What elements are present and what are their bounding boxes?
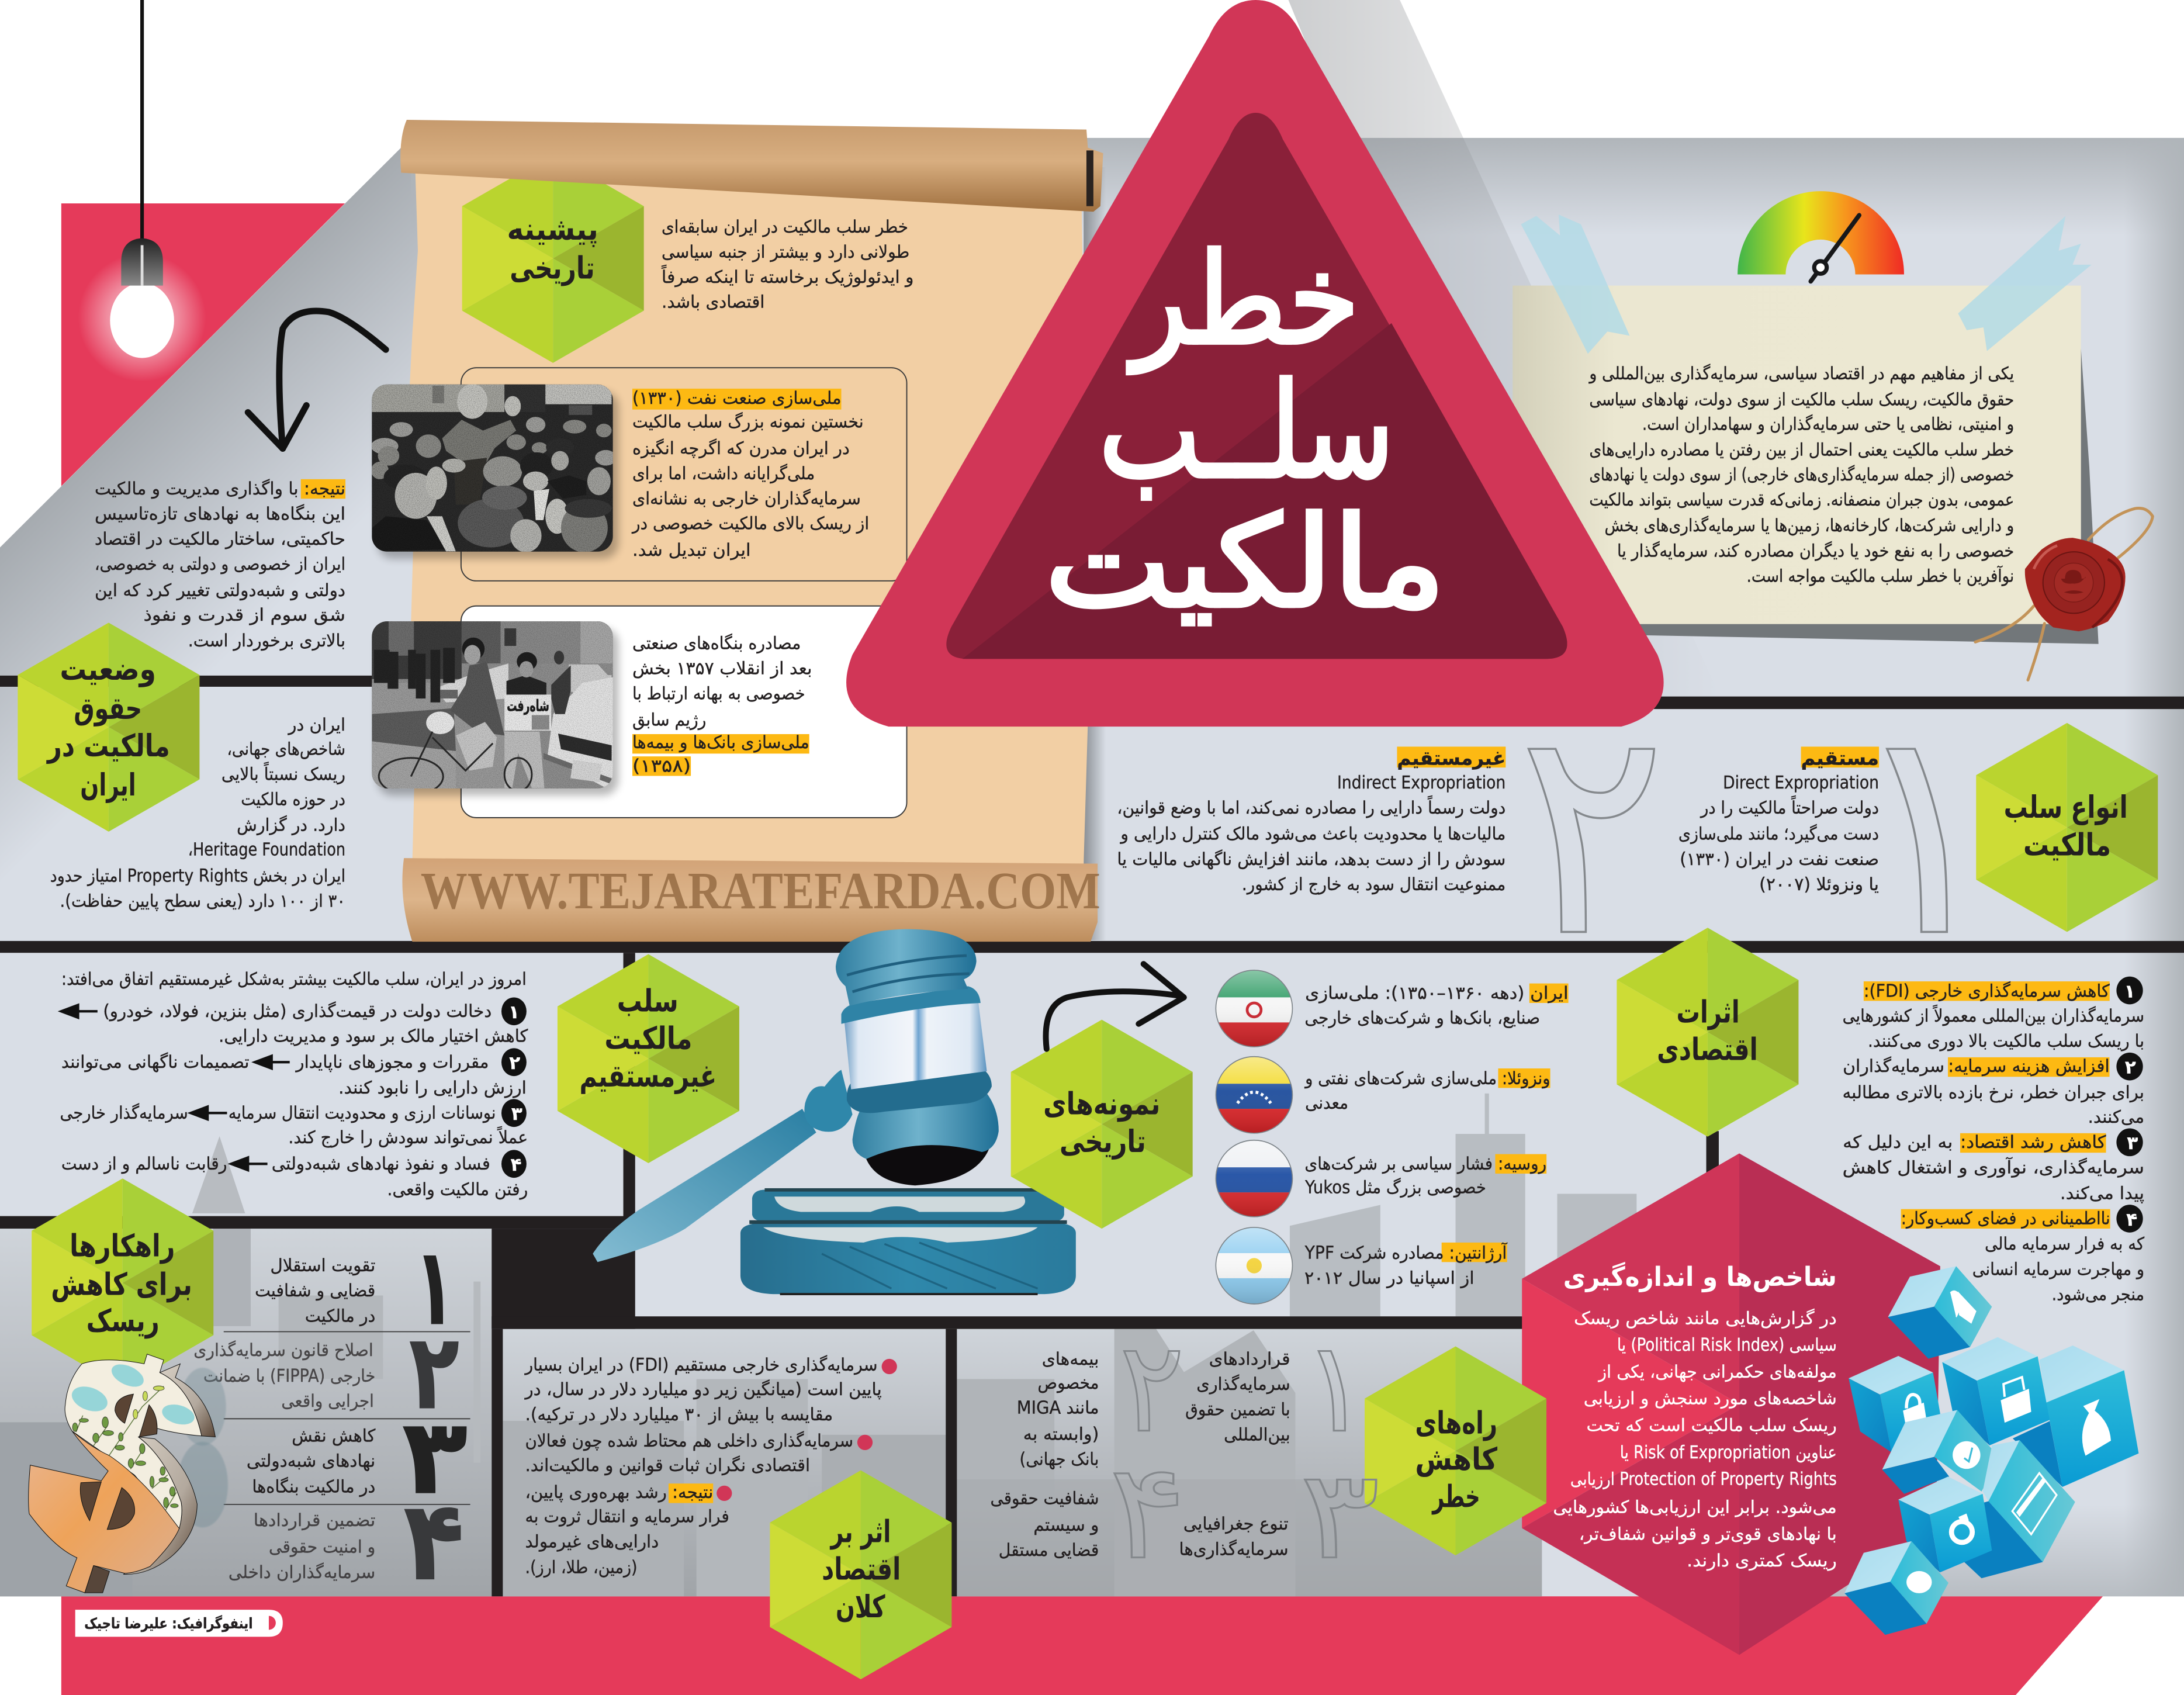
text: result of nationalisation: حاکمیتی، ساختار مالکیت در اقتصاد bbox=[95, 529, 345, 549]
text: country examples: ایران (دهه ۱۳۶۰–۱۳۵۰): ملی‌سازی bbox=[1305, 983, 1569, 1004]
hexagon heading: property rights status bbox=[18, 622, 199, 832]
big numbers: strategies: ۱ bbox=[415, 1225, 454, 1348]
text: Iran in property rights indexes bbox=[50, 715, 345, 912]
text: Iran in property rights indexes: دارد. در گزارش bbox=[237, 815, 345, 836]
text: risk reduction items: بانک جهانی) bbox=[1020, 1450, 1099, 1470]
box: oil nationalisation: ملی‌گرایانه داشت، اما برای bbox=[632, 463, 815, 484]
icon: risk gauge bbox=[1737, 191, 1904, 281]
text: indirect expropriation list: مقررات و مجوزهای ناپایدار bbox=[295, 1052, 489, 1073]
text: scroll introduction: طولانی دارد و بیشتر از جنبه سیاسی bbox=[662, 242, 909, 262]
panel: risk reduction background bbox=[957, 1329, 1542, 1596]
text: economic effects list: سرمایه‌گذاری، نوآوری و اشتغال کاهش bbox=[1843, 1157, 2144, 1178]
text: Iran in property rights indexes: شاخص‌های جهانی، bbox=[227, 739, 345, 760]
text: country examples: معدنی bbox=[1305, 1093, 1348, 1113]
number badge one: ۱ bbox=[2124, 981, 2135, 1002]
hexagon heading: solutions: راهکارها bbox=[70, 1229, 175, 1264]
text: direct expropriation bbox=[1678, 746, 1879, 895]
text: indirect expropriation: سودش را از دست بدهد، مانند افزایش ناگهانی مالیات یا bbox=[1117, 849, 1505, 870]
number badge three bbox=[2116, 1128, 2143, 1156]
main warning triangle bbox=[846, 0, 1664, 727]
number badge one bbox=[501, 997, 527, 1025]
text: scroll introduction: خطر سلب مالکیت در ایران سابقه‌ای bbox=[662, 217, 908, 237]
text: indirect expropriation list: رقابت ناسالم و از دست bbox=[61, 1154, 227, 1174]
dollar orange front bbox=[29, 1431, 179, 1593]
box: oil nationalisation bbox=[461, 368, 907, 581]
number badge four: ۴ bbox=[511, 1154, 522, 1175]
text: strategies list: در مالکیت bbox=[305, 1306, 375, 1327]
panel: pink bottom band bbox=[61, 1588, 2110, 1695]
hexagon panel: indicators: ریسک کمتری دارند. bbox=[1687, 1551, 1837, 1571]
hexagon panel: indicators: در گزارش‌هایی مانند شاخص ریسک bbox=[1574, 1308, 1837, 1329]
cube with lock bbox=[1849, 1356, 1943, 1452]
hexagon heading: property rights status: ایران bbox=[80, 767, 136, 803]
cube with price tag bbox=[1888, 1266, 1992, 1359]
text: risk reduction items: مخصوص bbox=[1038, 1373, 1099, 1393]
dollar counters bbox=[80, 1394, 157, 1530]
text: risk reduction items: قضایی مستقل bbox=[999, 1540, 1099, 1561]
icon: blue cubes bbox=[1844, 1266, 2138, 1635]
box: oil nationalisation: ایران تبدیل شد. bbox=[632, 540, 751, 561]
hexagon heading: historical examples: نمونه‌های bbox=[1043, 1087, 1160, 1122]
text: country examples: آرژانتین: مصادره شرکت YPF bbox=[1304, 1242, 1508, 1263]
big numbers: strategies: ۳ bbox=[403, 1396, 468, 1517]
scroll top roll bbox=[400, 120, 1103, 212]
text: indirect expropriation list: سرمایه‌گذار خارجی bbox=[60, 1103, 188, 1123]
text: Iran in property rights indexes: Heritage Foundation، bbox=[188, 839, 345, 860]
text: risk reduction items: بین‌المللی bbox=[1224, 1424, 1290, 1445]
gavel handle bbox=[593, 1109, 816, 1262]
text: Iran in property rights indexes: ایران در bbox=[287, 715, 345, 735]
hexagon heading: indirect expropriation bbox=[558, 954, 739, 1163]
hexagon heading: macro economy bbox=[770, 1471, 951, 1679]
number badge three: ۳ bbox=[511, 1104, 522, 1125]
cube with clock bbox=[1882, 1410, 2000, 1494]
flag: Argentina bbox=[1215, 1227, 1293, 1305]
text: economic effects list: سرمایه‌گذاران بین‌المللی معمولاً از کشورهایی bbox=[1843, 1005, 2144, 1026]
cube with bag bbox=[1942, 1337, 2050, 1445]
watermark: WWW.TEJARATEFARDA.COM bbox=[421, 861, 1100, 920]
hexagon panel: indicators: عناوین Risk of Expropriation یا bbox=[1620, 1443, 1837, 1463]
text: risk reduction items: قراردادهای bbox=[1209, 1349, 1290, 1369]
cube with credit card bbox=[1964, 1440, 2075, 1578]
newspaper headline: شاه‌رفت bbox=[507, 697, 549, 715]
text: direct expropriation: دست می‌گیرد؛ مانند ملی‌سازی bbox=[1678, 824, 1879, 844]
hexagon heading: property rights status: مالکیت در bbox=[46, 728, 170, 764]
hexagon heading: types of expropriation: مالکیت bbox=[2023, 827, 2111, 863]
text: economic effects list: که به فرار سرمایه مالی bbox=[1985, 1234, 2145, 1254]
hexagon heading: historical background: تاریخی bbox=[510, 251, 595, 286]
text: risk reduction items: سرمایه‌گذاری bbox=[1196, 1374, 1290, 1395]
hexagon heading: historical background: پیشینه bbox=[507, 212, 598, 247]
note paper with text: عمومی، بدون جبران منصفانه. زمانی‌که قدرت سیاسی بتواند مالکیت bbox=[1589, 490, 2014, 510]
box: bank nationalisation: ملی‌سازی بانک‌ها و بیمه‌ها bbox=[632, 732, 809, 753]
text: scroll introduction: اقتصادی باشد. bbox=[662, 292, 764, 313]
hexagon panel: indicators: سیاسی (Political Risk Index) یا bbox=[1617, 1335, 1837, 1355]
text: indirect expropriation list: رفتن مالکیت واقعی. bbox=[387, 1179, 528, 1200]
text: indirect expropriation list: کاهش اختیار مالک بر سود و مدیریت دارایی. bbox=[219, 1026, 528, 1047]
hexagon heading: economic effects: اقتصادی bbox=[1657, 1032, 1758, 1068]
text: Iran in property rights indexes: ایران در بخش Property Rights امتیاز حدود bbox=[50, 866, 345, 887]
number badge four: ۴ bbox=[2126, 1209, 2137, 1230]
text: Iran in property rights indexes: ۳۰ از ۱۰۰ دارد (یعنی سطح پایین حفاظت). bbox=[60, 891, 345, 912]
credit tag: اینفوگرافیک: علیرضا تاجیک bbox=[84, 1615, 253, 1632]
text: direct expropriation: یا ونزوئلا (۲۰۰۷) bbox=[1759, 874, 1879, 895]
text: macro economic effect: پایین است (میانگین زیر دو میلیارد دلار در سال، در bbox=[524, 1379, 882, 1400]
text: macro economic effect: سرمایه‌گذاری داخلی هم محتاط شده چون فعالان bbox=[525, 1431, 853, 1451]
text: economic effects list: کاهش رشد اقتصاد: bbox=[1960, 1132, 2106, 1153]
hexagon heading: indirect expropriation: مالکیت bbox=[604, 1021, 692, 1057]
box: bank nationalisation bbox=[461, 606, 907, 818]
main warning triangle: مالکیت bbox=[1044, 490, 1446, 636]
text: economic effects list: منجر می‌شود. bbox=[2052, 1285, 2144, 1305]
text: economic effects list: کاهش سرمایه‌گذاری خارجی (FDI): bbox=[1864, 981, 2110, 1002]
text: indirect expropriation: ممنوعیت انتقال سود به خارج از کشور. bbox=[1242, 874, 1505, 895]
note paper with text: یکی از مفاهیم مهم در اقتصاد سیاسی، سرمایه‌گذاری بین‌المللی و bbox=[1588, 364, 2014, 384]
text: indirect expropriation: غیرمستقیم bbox=[1397, 746, 1505, 770]
hexagon heading: macro economy: اثر بر bbox=[829, 1514, 891, 1549]
cube with coin arrow bbox=[1898, 1476, 1992, 1572]
hexagon heading: economic effects: اثرات bbox=[1677, 994, 1740, 1030]
text: result of nationalisation: ایران از خصوصی و دولتی به خصوصی، bbox=[95, 554, 345, 575]
cube with piggy bank bbox=[1844, 1541, 1948, 1635]
text: strategies list: خارجی (FIPPA) با ضمانت bbox=[203, 1366, 375, 1386]
text: direct expropriation: صنعت نفت در ایران (۱۳۳۰) bbox=[1680, 849, 1879, 870]
text: economic effects list: سرمایه‌گذاران bbox=[1843, 1056, 1944, 1077]
box: bank nationalisation: (۱۳۵۸) bbox=[632, 756, 691, 776]
hexagon heading: historical examples: تاریخی bbox=[1060, 1124, 1146, 1160]
text: direct expropriation: مستقیم bbox=[1801, 746, 1879, 769]
text: strategies list bbox=[193, 1255, 376, 1583]
number badge three bbox=[501, 1099, 527, 1127]
hexagon panel: indicators: شاخصه‌های مورد سنجش و ارزیابی bbox=[1584, 1388, 1837, 1409]
text: risk reduction items: مانند MIGA bbox=[1017, 1398, 1099, 1419]
hexagon heading: historical background bbox=[462, 154, 644, 363]
text: macro economic effect: اقتصادی نگران ثبات قوانین و مالکیت‌اند. bbox=[525, 1455, 810, 1476]
gavel neck collar bbox=[804, 1070, 853, 1132]
photo shadows bbox=[378, 392, 618, 795]
dollar side depth bbox=[160, 1364, 215, 1437]
text: country examples: صنایع، بانک‌ها و شرکت‌های خارجی bbox=[1304, 1008, 1540, 1029]
scroll body bbox=[408, 164, 1106, 940]
text: strategies list: قضایی و شفافیت bbox=[255, 1281, 375, 1301]
note paper with text: خطر سلب مالکیت یعنی احتمال از بین رفتن یا مصادره دارایی‌های bbox=[1589, 440, 2014, 460]
photo: oil nationalisation crowd bbox=[372, 385, 613, 552]
text: economic effects list: با ریسک سلب مالکیت بالا دوری می‌کنند. bbox=[1868, 1031, 2144, 1051]
text: macro economic effect: (زمین، طلا، ارز). bbox=[525, 1557, 638, 1578]
text: strategies list: نهادهای شبه‌دولتی bbox=[247, 1451, 375, 1472]
number badge four bbox=[501, 1150, 527, 1178]
hexagon panel: indicators: با نهادهای قوی‌تر و قوانین شفاف‌تر، bbox=[1579, 1524, 1837, 1544]
arrow: curved from scroll to result bbox=[248, 311, 386, 448]
outline numbers: risk reduction: ۲ bbox=[1119, 1315, 1185, 1461]
text: direct expropriation: دولت صراحتاً مالکیت را در bbox=[1700, 795, 1879, 818]
text: strategies list: کاهش نقش bbox=[292, 1426, 376, 1447]
text: indirect expropriation list: عملاً نمی‌تواند سودش را خارج کند. bbox=[288, 1126, 528, 1148]
text: strategies list: اصلاح قانون سرمایه‌گذاری bbox=[193, 1340, 373, 1361]
text: indirect expropriation: Indirect Expropriation bbox=[1337, 773, 1505, 793]
text: strategies list: در مالکیت بنگاه‌ها bbox=[252, 1477, 375, 1497]
text: indirect expropriation list: فساد و نفوذ نهادهای شبه‌دولتی bbox=[272, 1154, 490, 1174]
text: country examples: ونزوئلا: ملی‌سازی شرکت‌های نفتی و bbox=[1304, 1068, 1550, 1089]
hexagon heading: ways to reduce risk: کاهش bbox=[1415, 1441, 1497, 1477]
hexagon heading: macro economy: اقتصاد bbox=[822, 1552, 901, 1587]
hexagon heading: types of expropriation bbox=[1976, 723, 2158, 932]
hexagon heading: ways to reduce risk: راه‌های bbox=[1415, 1405, 1497, 1441]
gavel head bbox=[836, 929, 999, 1185]
outline numbers: risk reduction: ۱ bbox=[1301, 1315, 1370, 1461]
gavel base bbox=[740, 1188, 1076, 1294]
dollar clouds bbox=[68, 1360, 197, 1428]
text: risk reduction items: سرمایه‌گذاری‌ها bbox=[1179, 1540, 1289, 1560]
icon: wax seal bbox=[1975, 508, 2152, 680]
number badge three: ۳ bbox=[2127, 1133, 2138, 1154]
text: economic effects list: می‌کنند. bbox=[2088, 1107, 2144, 1127]
bullet bbox=[717, 1486, 732, 1501]
text: strategies list: تقویت استقلال bbox=[270, 1255, 375, 1276]
hexagon heading: solutions: برای کاهش bbox=[51, 1267, 192, 1302]
number badge two: ۲ bbox=[509, 1053, 520, 1074]
text: risk reduction items: تنوع جغرافیایی bbox=[1183, 1514, 1289, 1534]
hexagon panel: indicators: ریسک سلب مالکیت است که تحت bbox=[1587, 1416, 1837, 1436]
hexagon panel: indicators: Protection of Property Rights ارزیابی bbox=[1570, 1469, 1837, 1490]
hexagon heading: types of expropriation: انواع سلب bbox=[2004, 790, 2128, 825]
text: scroll introduction: و ایدئولوژیک برخاسته تا اینکه صرفاً bbox=[662, 264, 913, 288]
number badge four bbox=[2116, 1205, 2143, 1233]
panel: macro economy background bbox=[503, 1329, 946, 1596]
note paper with text: خصوصی را به نفع خود یا دیگران مصادره کند، سرمایه‌گذار یا bbox=[1617, 541, 2014, 561]
text: macro economic effect: فرار سرمایه و انتقال ثروت به bbox=[525, 1506, 729, 1527]
flag: Russia bbox=[1215, 1140, 1293, 1217]
text: economic effects list: پیدا می‌کند. bbox=[2060, 1183, 2144, 1203]
text: result of nationalisation bbox=[95, 479, 345, 651]
big numbers: strategies: ۲ bbox=[410, 1312, 459, 1432]
number badge two bbox=[501, 1048, 527, 1076]
bullet bbox=[882, 1359, 897, 1374]
outline number 1: ۱ bbox=[1847, 665, 2003, 1000]
box: bank nationalisation: رژیم سابق bbox=[632, 710, 706, 731]
text: macro economic effect: سرمایه‌گذاری خارجی مستقیم (FDI) در ایران بسیار bbox=[524, 1355, 877, 1375]
text: strategies list: تضمین قراردادها bbox=[254, 1510, 375, 1531]
credit tag bbox=[75, 1610, 283, 1637]
text: indirect expropriation list: نوسانات ارزی و محدودیت انتقال سرمایه bbox=[229, 1103, 496, 1123]
strategy dividers bbox=[224, 1331, 470, 1504]
text: indirect expropriation: دولت رسماً دارایی را مصادره نمی‌کند، اما با وضع قوانین، bbox=[1117, 795, 1505, 818]
text: Iran in property rights indexes: در حوزه مالکیت bbox=[241, 790, 345, 810]
text: economic effects list: افزایش هزینه سرمایه: bbox=[1948, 1056, 2110, 1077]
arrow: towards flags bbox=[1046, 964, 1184, 1049]
cube with money sack bbox=[2013, 1345, 2138, 1487]
text: result of nationalisation: شق سوم از قدرت و نفوذ bbox=[143, 605, 345, 625]
dark divider lines bbox=[0, 676, 2184, 1596]
big numbers: strategies bbox=[403, 1225, 468, 1604]
tape right bbox=[1958, 216, 2092, 351]
dollar vines bbox=[76, 1386, 176, 1510]
outline numbers: risk reduction bbox=[1109, 1315, 1380, 1589]
box: oil nationalisation: نخستین نمونه بزرگ سلب مالکیت bbox=[632, 412, 864, 433]
text: strategies list: سرمایه‌گذاران داخلی bbox=[229, 1562, 375, 1583]
hexagon heading: economic effects bbox=[1617, 928, 1798, 1137]
triangle shadow bbox=[1289, 0, 1720, 697]
text: economic effects list: به این دلیل که bbox=[1843, 1132, 1953, 1153]
number badge two bbox=[2116, 1053, 2143, 1080]
hexagon heading: solutions bbox=[32, 1178, 213, 1388]
hexagon heading: ways to reduce risk: خطر bbox=[1431, 1479, 1480, 1515]
hexagon panel: indicators bbox=[1522, 1153, 1940, 1655]
text: indirect expropriation: مالیات‌ها یا محدودیت باعث می‌شود مالک کنترل دارایی و bbox=[1119, 824, 1505, 844]
note paper with text: و امنیتی، نظامی یا حتی سرمایه‌گذاران و سهامداران است. bbox=[1642, 414, 2014, 434]
big numbers: strategies: ۴ bbox=[404, 1478, 464, 1604]
text: country examples: از اسپانیا در سال ۲۰۱۲ bbox=[1304, 1268, 1475, 1288]
text: indirect expropriation list: امروز در ایران، سلب مالکیت بیشتر به‌شکل غیرمستقیم اتفاق می‌افتد: bbox=[61, 969, 527, 990]
text: indirect expropriation list: ارزش دارایی را نابود کنند. bbox=[338, 1078, 527, 1098]
text: indirect expropriation list bbox=[60, 969, 528, 1200]
number badge one: ۱ bbox=[508, 1002, 520, 1023]
tape left bbox=[1521, 215, 1629, 354]
title: خطر bbox=[1127, 226, 1359, 373]
note paper with text: نوآفرین با خطر سلب مالکیت مواجه است. bbox=[1747, 566, 2014, 587]
dollar cream front bbox=[65, 1354, 202, 1528]
box: oil nationalisation: ملی‌سازی صنعت نفت (۱۳۳۰) bbox=[632, 388, 842, 409]
outline numbers: risk reduction: ۴ bbox=[1109, 1435, 1187, 1589]
box: bank nationalisation: مصادره بنگاه‌های صنعتی bbox=[632, 634, 801, 654]
arrows in list bbox=[61, 1005, 290, 1170]
box: bank nationalisation: بعد از انقلاب ۱۳۵۷ بخش bbox=[632, 659, 812, 679]
skyline behind examples bbox=[1290, 1094, 1636, 1316]
panel: pink corner top left bbox=[61, 203, 345, 486]
hexagon heading: ways to reduce risk bbox=[1365, 1346, 1546, 1555]
text: country examples: روسیه: فشار سیاسی بر شرکت‌های bbox=[1304, 1154, 1546, 1174]
hexagon heading: macro economy: کلان bbox=[836, 1589, 885, 1625]
main warning triangle: سلــب bbox=[1099, 355, 1394, 507]
hexagon heading: indirect expropriation: غیرمستقیم bbox=[579, 1058, 717, 1094]
text: risk reduction items: بیمه‌های bbox=[1042, 1349, 1099, 1369]
hexagon panel: indicators: شاخص‌ها و اندازه‌گیری bbox=[1563, 1261, 1837, 1292]
hexagon heading: historical examples bbox=[1011, 1020, 1193, 1229]
text: result of nationalisation: نتیجه: با واگذاری مدیریت و مالکیت bbox=[95, 479, 345, 499]
text: indirect expropriation list: دخالت دولت در قیمت‌گذاری (مثل بنزین، فولاد، خودرو) bbox=[103, 1001, 492, 1022]
text: risk reduction items: و سیستم bbox=[1033, 1515, 1099, 1535]
box: oil nationalisation: سرمایه‌گذاران خارجی به نشانه‌ای bbox=[632, 489, 861, 509]
box: bank nationalisation: خصوصی به بهانه ارتباط با bbox=[632, 683, 805, 704]
text: strategies list: و امنیت حقوقی bbox=[269, 1537, 375, 1558]
note paper with text: خصوصی (از جمله سرمایه‌گذاری‌های خارجی) از سوی دولت یا نهادهای bbox=[1589, 465, 2014, 485]
hexagon heading: indirect expropriation: سلب bbox=[617, 983, 679, 1019]
hexagon panel: indicators: مولفه‌های حکمرانی جهانی، یکی از bbox=[1597, 1362, 1837, 1382]
box: oil nationalisation: در ایران مدرن که اگرچه انگیزه bbox=[632, 438, 850, 459]
hexagon heading: property rights status: وضعیت bbox=[60, 652, 156, 687]
icon: hanging light bulb bbox=[78, 0, 206, 382]
text: result of nationalisation: بالاتری برخوردار است. bbox=[188, 631, 345, 651]
bullet bbox=[857, 1435, 873, 1450]
text: direct expropriation: Direct Expropriation bbox=[1723, 773, 1879, 793]
scroll bottom roll bbox=[402, 858, 1098, 942]
text: scroll introduction bbox=[662, 217, 913, 313]
text: macro economic effect: مقایسه با بیش از ۳۰ میلیارد دلار در ترکیه). bbox=[525, 1405, 833, 1425]
text: macro economic effect: دارایی‌های غیرمولد bbox=[525, 1532, 659, 1552]
photo: revolution street scene bbox=[372, 621, 613, 788]
text: risk reduction items: شفافیت حقوقی bbox=[991, 1489, 1099, 1509]
number badge one bbox=[2116, 977, 2143, 1004]
text: economic effects list bbox=[1843, 977, 2145, 1305]
text: economic effects list: برای جبران خطر، نرخ بازده بالاتری مطالبه bbox=[1843, 1082, 2144, 1103]
text: strategies list: اجرایی واقعی bbox=[281, 1391, 374, 1412]
text: indirect expropriation bbox=[1117, 746, 1505, 895]
text: economic effects list: نااطمینانی در فضای کسب‌وکار: bbox=[1901, 1208, 2110, 1229]
icon: gavel bbox=[593, 929, 1076, 1294]
box: oil nationalisation: از ریسک بالای مالکیت خصوصی در bbox=[631, 514, 869, 534]
outline numbers: risk reduction: ۳ bbox=[1300, 1444, 1380, 1587]
text: result of nationalisation: دولتی و شبه‌دولتی تغییر کرد که این bbox=[95, 580, 345, 601]
text: macro economic effect bbox=[524, 1355, 897, 1578]
hexagon heading: solutions: ریسک bbox=[86, 1303, 160, 1338]
hexagon panel: indicators: می‌شود. برابر این ارزیابی‌ها کشورهایی bbox=[1553, 1497, 1837, 1517]
text: risk reduction items bbox=[991, 1349, 1290, 1561]
text: country examples bbox=[1304, 983, 1569, 1288]
text: indirect expropriation list: تصمیمات ناگهانی می‌توانند bbox=[61, 1052, 250, 1073]
text: Iran in property rights indexes: ریسک نسبتاً بالایی bbox=[221, 762, 345, 785]
icon: dollar sign illustration bbox=[29, 1354, 228, 1593]
note paper with text bbox=[1512, 215, 2099, 644]
flag: Venezuela bbox=[1215, 1056, 1293, 1134]
note paper with text: حقوق مالکیت، ریسک سلب مالکیت از سوی دولت، نهادهای سیاسی bbox=[1589, 390, 2014, 410]
hexagon heading: property rights status: حقوق bbox=[74, 691, 142, 727]
text: macro economic effect: نتیجه: رشد بهره‌وری پایین، bbox=[525, 1482, 713, 1503]
panel: strategies background bbox=[0, 1136, 492, 1596]
note paper with text: و دارایی شرکت‌ها، کارخانه‌ها، زمین‌ها یا سرمایه‌گذاری‌های بخش bbox=[1605, 516, 2014, 536]
text: risk reduction items: (وابسته به bbox=[1023, 1424, 1099, 1444]
text: country examples: خصوصی بزرگ مثل Yukos bbox=[1304, 1178, 1486, 1198]
outline number 2: ۲ bbox=[1518, 665, 1667, 1000]
flag: Iran bbox=[1215, 970, 1293, 1047]
text: economic effects list: و مهاجرت سرمایه انسانی bbox=[1972, 1259, 2144, 1279]
text: risk reduction items: با تضمین حقوق bbox=[1185, 1399, 1290, 1420]
number badge two: ۲ bbox=[2125, 1057, 2136, 1078]
text: result of nationalisation: این بنگاه‌ها به نهادهای تازه‌تاسیس bbox=[95, 504, 345, 524]
